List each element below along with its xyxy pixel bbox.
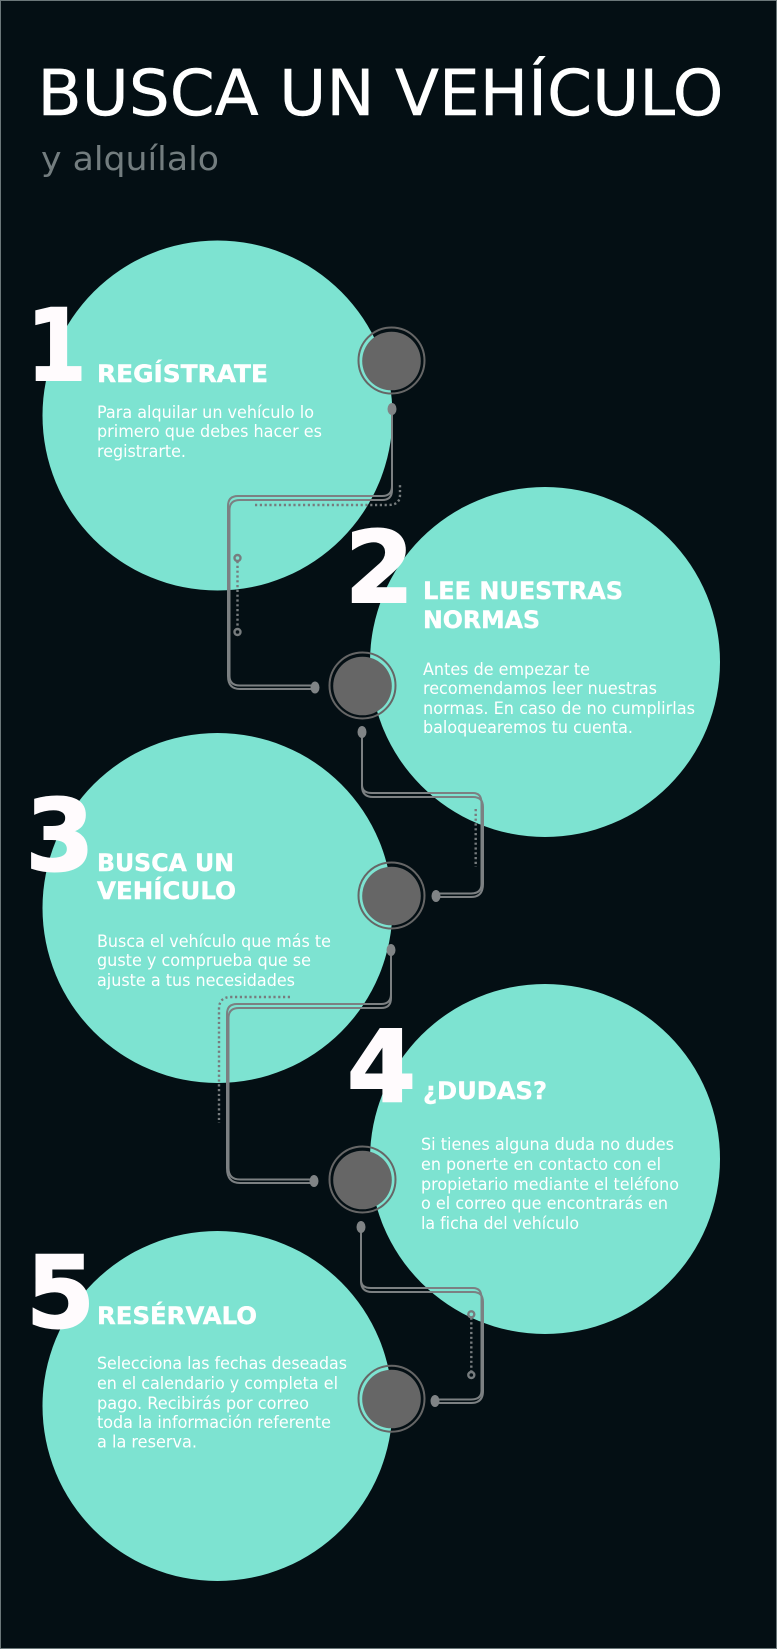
heading: lee nuestras normas: LEE NUESTRAS bbox=[423, 577, 623, 605]
body: step 1: primero que debes hacer es bbox=[97, 422, 322, 442]
body: step 2: normas. En caso de no cumplirlas bbox=[423, 699, 695, 719]
heading: busca un vehículo: BUSCA UN bbox=[97, 849, 234, 877]
connector: step 4 to step 5 bbox=[356, 1221, 483, 1407]
body: step 3 bbox=[97, 932, 331, 991]
icon: hub 3 bbox=[358, 862, 424, 928]
panel: step 4 circle bbox=[370, 984, 720, 1334]
number 5: 5 bbox=[26, 1236, 95, 1351]
body: step 1: Para alquilar un vehículo lo bbox=[97, 403, 314, 423]
body: step 1 bbox=[97, 403, 322, 462]
heading: dudas: ¿DUDAS? bbox=[423, 1077, 547, 1105]
body: step 5: en el calendario y completa el bbox=[97, 1374, 338, 1394]
step 3 text bbox=[26, 779, 331, 991]
connector: step 3 to step 4 bbox=[219, 944, 396, 1187]
heading: resérvalo: RESÉRVALO bbox=[97, 1301, 257, 1330]
heading: lee nuestras normas bbox=[423, 577, 623, 634]
body: step 4: en ponerte en contacto con el bbox=[421, 1155, 661, 1175]
heading: busca un vehículo: VEHÍCULO bbox=[97, 876, 236, 905]
connector: step 1 to step 2 bbox=[228, 403, 400, 694]
heading: busca un vehículo bbox=[97, 849, 236, 905]
number 1: 1 bbox=[26, 289, 86, 404]
body: step 4 bbox=[421, 1135, 679, 1234]
body: step 3: Busca el vehículo que más te bbox=[97, 932, 331, 952]
subtitle: y alquílalo bbox=[41, 139, 219, 178]
body: step 4: o el correo que encontrarás en bbox=[421, 1194, 668, 1214]
icon: hub 5 bbox=[358, 1366, 424, 1432]
icon: hub 2 bbox=[330, 652, 396, 718]
body: step 4: propietario mediante el teléfono bbox=[421, 1175, 679, 1195]
panel: step 5 circle bbox=[42, 1231, 392, 1581]
step 2 text bbox=[345, 511, 695, 738]
heading: lee nuestras normas: NORMAS bbox=[423, 606, 540, 634]
connector: step 2 to step 3 bbox=[358, 726, 483, 902]
body: step 5: toda la información referente bbox=[97, 1413, 331, 1433]
body: step 5: Selecciona las fechas deseadas bbox=[97, 1354, 347, 1374]
heading: regístrate: REGÍSTRATE bbox=[97, 359, 268, 388]
number 2: 2 bbox=[345, 511, 414, 626]
panel: step 2 circle bbox=[370, 487, 720, 837]
body: step 3: ajuste a tus necesidades bbox=[97, 971, 295, 991]
panel: step 3 circle bbox=[42, 733, 392, 1083]
body: step 2: baloquearemos tu cuenta. bbox=[423, 718, 633, 738]
body: step 4: Si tienes alguna duda no dudes bbox=[421, 1135, 674, 1155]
body: step 5: a la reserva. bbox=[97, 1432, 197, 1452]
number 4: 4 bbox=[347, 1010, 416, 1125]
body: step 5 bbox=[97, 1354, 347, 1452]
step 4 text bbox=[347, 1010, 679, 1234]
body: step 4: la ficha del vehículo bbox=[421, 1214, 579, 1234]
icon: hub 1 bbox=[358, 328, 424, 394]
body: step 2 bbox=[423, 660, 695, 738]
body: step 2: Antes de empezar te bbox=[423, 660, 590, 680]
step 1 text bbox=[26, 289, 322, 462]
body: step 3: guste y comprueba que se bbox=[97, 951, 311, 971]
title: BUSCA UN VEHÍCULO bbox=[38, 57, 724, 130]
body: step 5: pago. Recibirás por correo bbox=[97, 1394, 309, 1414]
body: step 1: registrarte. bbox=[97, 442, 186, 462]
icon: hub 4 bbox=[330, 1146, 396, 1212]
panel: step 1 circle bbox=[42, 240, 392, 590]
number 3: 3 bbox=[26, 779, 94, 894]
body: step 2: recomendamos leer nuestras bbox=[423, 679, 657, 699]
step 5 text bbox=[26, 1236, 347, 1452]
